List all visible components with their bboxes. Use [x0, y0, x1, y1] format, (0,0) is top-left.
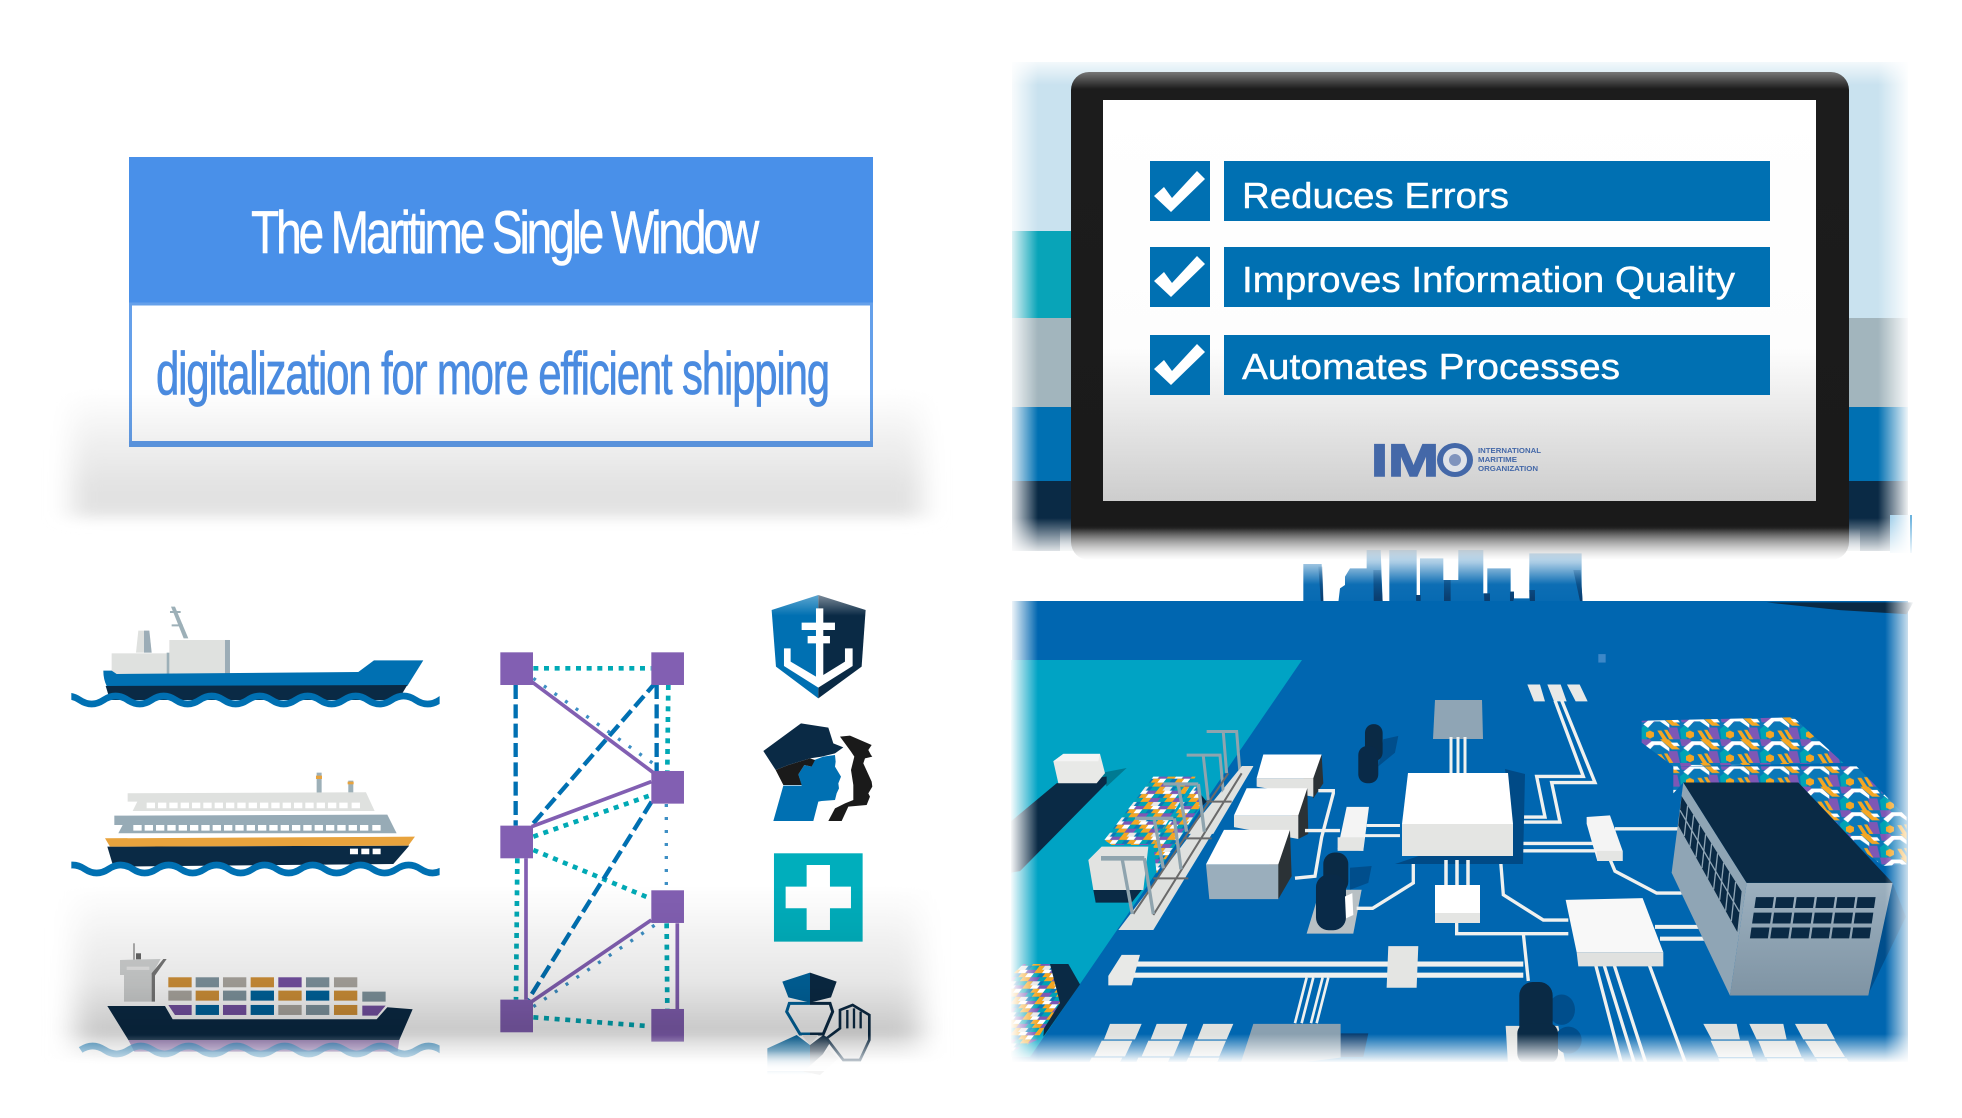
subtitle: digitalization for more efficient shipping: digitalization for more efficient shipping: [156, 340, 830, 407]
icons column: [763, 595, 872, 1075]
blue dashed links: [516, 683, 657, 1000]
yard tiles lower right: [1703, 1024, 1857, 1075]
panel: vessel types: [71, 606, 440, 1058]
yard tiles lower left: [1083, 1024, 1233, 1074]
pipe connector left: [1108, 955, 1140, 985]
pipes to building: [1655, 927, 1705, 939]
lower junction block: [1435, 860, 1480, 923]
quay with container ship and cranes: [1088, 766, 1253, 930]
junction box right: [1587, 815, 1623, 861]
central server block: [1395, 769, 1525, 864]
junction box: [1338, 807, 1369, 851]
terminal building: [1672, 783, 1906, 995]
gantry cranes: [1101, 784, 1204, 914]
row: Improves Information Quality: [1150, 247, 1770, 307]
heading: The Maritime Single Window: The Maritime Single Window: [251, 200, 759, 266]
purple solid links: [526, 682, 677, 1009]
blue dotted links: [533, 678, 666, 1007]
building front windows: [1750, 897, 1876, 938]
vessel hull block: [1088, 847, 1148, 903]
storage tanks upper: [1358, 724, 1398, 783]
small marker: [1598, 654, 1606, 663]
icon: anchor shield: [772, 595, 866, 698]
containers lower left: [1000, 964, 1080, 1057]
monitor screen: [1103, 100, 1816, 501]
row: Automates Processes: Automates Processes: [1242, 346, 1620, 387]
panel: monitor with benefits: [1005, 55, 1915, 560]
row: Improves Information Quality: Improves Information Quality: [1242, 259, 1735, 300]
row: Automates Processes: [1150, 335, 1770, 395]
ship at anchor: [1000, 754, 1127, 874]
quay: [1118, 766, 1253, 930]
IMO logo: ORGANIZATION: [1478, 464, 1538, 473]
teal dotted links: [516, 668, 668, 1026]
IMO logo: INTERNATIONAL: [1478, 446, 1541, 455]
port backdrop behind monitor: [1005, 55, 1915, 560]
ship: container vessel: [81, 943, 489, 1054]
gray control block: [1433, 700, 1483, 773]
skyline: [1303, 550, 1592, 622]
icon: seafarers: [763, 723, 872, 821]
tiles upper: [1527, 685, 1588, 701]
main pipe run: [1132, 964, 1523, 975]
network nodes: [500, 652, 684, 1042]
row: Reduces Errors: [1150, 161, 1770, 221]
switch box: [1566, 898, 1663, 966]
IMO logo: [1371, 435, 1541, 486]
row: Reduces Errors: Reduces Errors: [1242, 175, 1509, 216]
distant sea wedge: [1767, 602, 1913, 614]
subtitle box: [129, 304, 873, 447]
chart: network diagram: [500, 652, 684, 1042]
ground and water: [1000, 601, 1908, 1068]
IMO logo: MARITIME: [1478, 455, 1517, 464]
pipe connector centre: [1387, 946, 1418, 988]
warehouses: [1206, 754, 1323, 899]
pipes from warehouses: [1295, 791, 1340, 878]
storage tanks lower: [1307, 853, 1372, 934]
far quay and cranes: [1187, 732, 1253, 834]
ship: general cargo: [56, 607, 464, 704]
monitor frame: [1071, 72, 1849, 560]
building side windows: [1678, 796, 1742, 932]
lower tanks: [1506, 982, 1582, 1070]
IMO logo: IM: [1371, 435, 1439, 486]
title banner: [129, 157, 873, 304]
lower-left shading band: [75, 885, 920, 1060]
panel: digital port illustration: [985, 550, 1943, 1092]
icon: medical cross: [774, 853, 863, 942]
gray building bottom: [1238, 1024, 1368, 1071]
thin pipes: [1457, 700, 1682, 981]
icon: customs officer: [767, 973, 869, 1075]
stacked containers: [1642, 717, 1907, 866]
port edge fades: [985, 595, 1943, 1092]
panel: title card: [72, 157, 922, 520]
ship: passenger ferry: [61, 773, 469, 873]
container stacks on vessel: [1104, 777, 1207, 873]
